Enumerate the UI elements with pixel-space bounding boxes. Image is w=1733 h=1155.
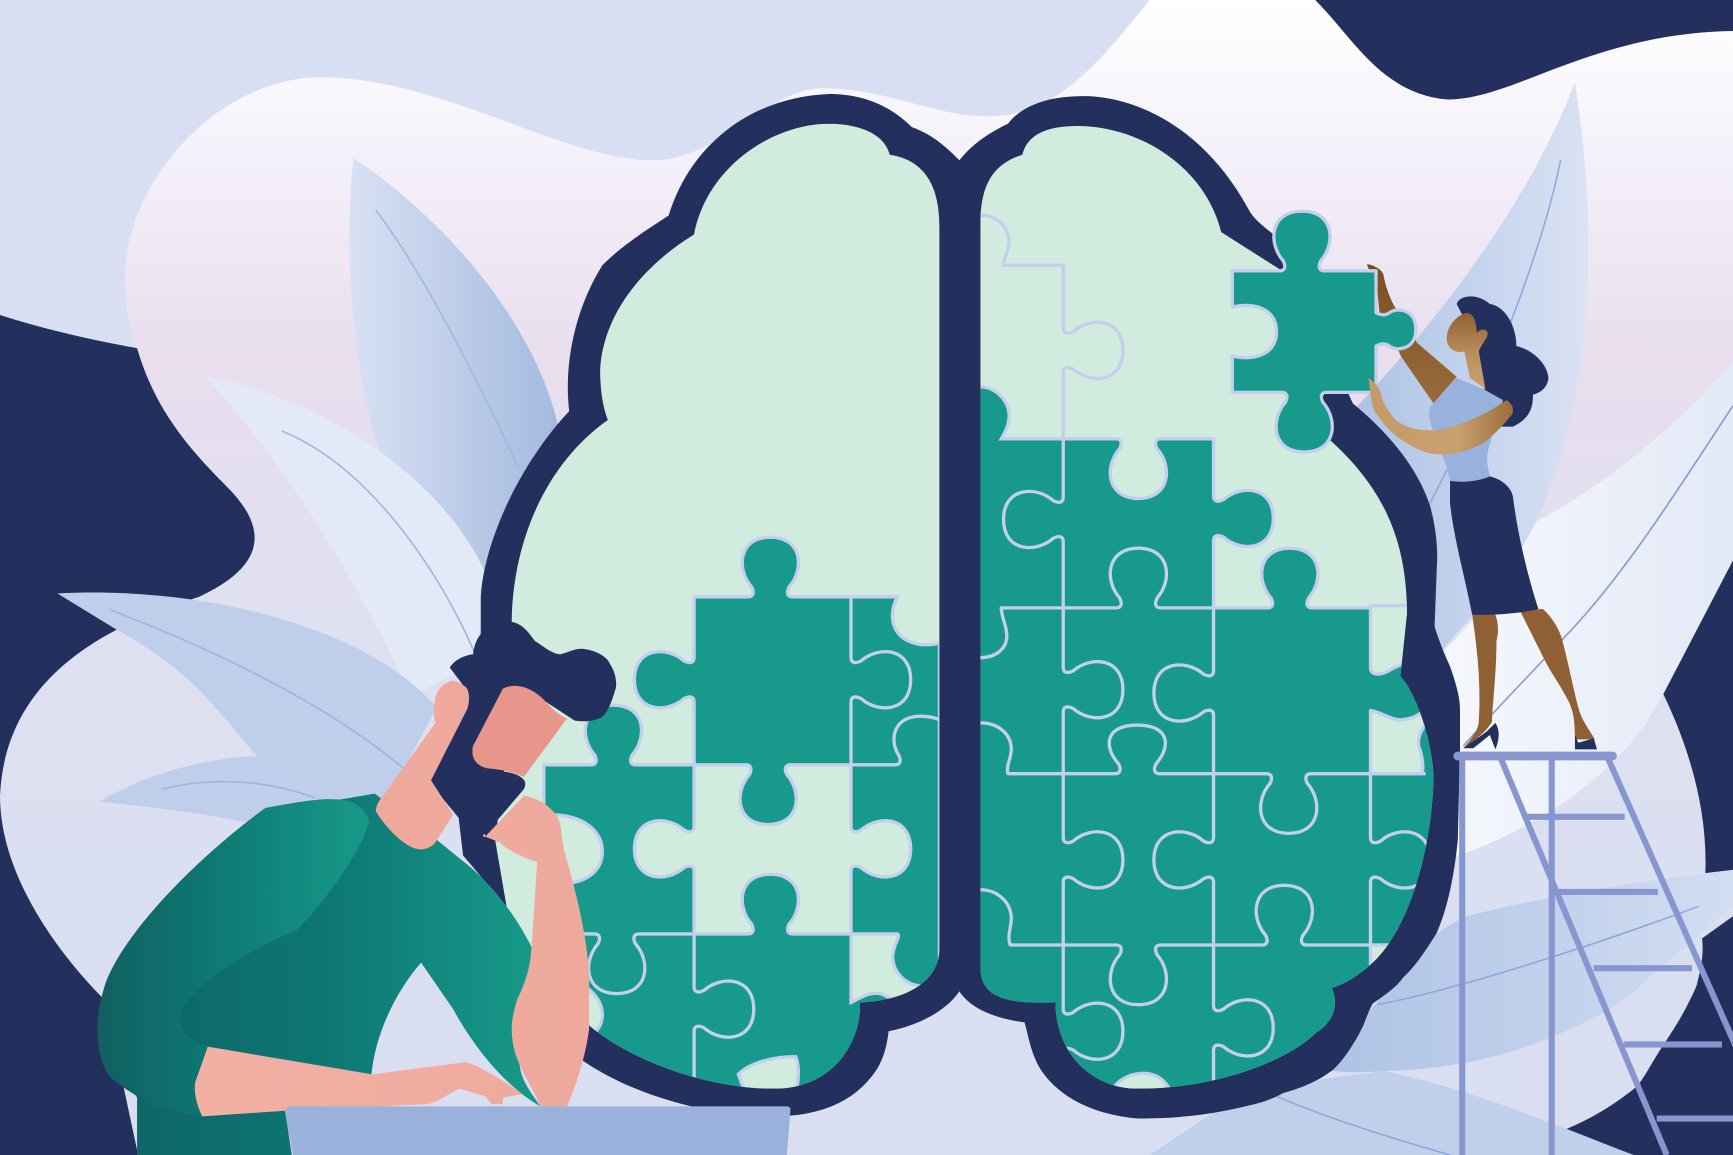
woman's skirt bbox=[1450, 476, 1538, 615]
man's arm supporting chin bbox=[485, 796, 589, 1106]
man's forearm and hand bbox=[195, 1047, 523, 1116]
navy shape: right bbox=[1663, 560, 1733, 873]
navy shape: lower right bbox=[1565, 916, 1733, 1155]
man's hair and beard bbox=[431, 622, 616, 852]
right lobe puzzle bbox=[980, 126, 1434, 1089]
brain outline bbox=[481, 94, 1460, 1119]
woman on ladder bbox=[1368, 296, 1597, 749]
woman's lower arm bbox=[1368, 378, 1513, 454]
left lobe mint base bbox=[475, 111, 950, 1105]
leaf: bottom bbox=[1149, 1071, 1634, 1155]
woman's hair bbox=[1457, 296, 1548, 427]
leaf: lower right bbox=[1315, 870, 1733, 1072]
ladder bbox=[1453, 752, 1733, 1155]
floating puzzle piece bbox=[1232, 211, 1416, 452]
woman's legs bbox=[1463, 609, 1595, 748]
man's face bbox=[472, 686, 567, 777]
man's hair back strip bbox=[459, 818, 506, 906]
navy shape: left bbox=[0, 315, 255, 1155]
right lobe teal pieces bbox=[980, 385, 1434, 1088]
right lobe mint patches bbox=[1111, 606, 1429, 1094]
laptop bbox=[286, 1106, 790, 1155]
woman's raised arm bbox=[1367, 264, 1457, 403]
leaf: upper left bbox=[349, 158, 580, 619]
man's sleeve bbox=[97, 799, 369, 1115]
woman's face and neck bbox=[1447, 313, 1488, 389]
man's raised arm and hand bbox=[376, 681, 469, 849]
leaf: upper right behind woman bbox=[1353, 83, 1588, 659]
ladder platform bbox=[1453, 752, 1617, 760]
right lobe top piece lines bbox=[980, 215, 1123, 439]
left lobe puzzle bbox=[475, 111, 950, 1105]
left lobe teal pieces bbox=[544, 537, 939, 1105]
leaf: white right bbox=[1435, 360, 1733, 857]
leaf: middle left bbox=[204, 376, 486, 696]
left lobe mint centre piece bbox=[634, 765, 911, 934]
right lobe mint base bbox=[973, 111, 1459, 1105]
left lobe mint patches bbox=[542, 815, 920, 1095]
man's body bbox=[122, 794, 540, 1155]
navy shape: top right bbox=[1315, 0, 1733, 99]
left lobe piece lines bbox=[584, 597, 943, 1098]
woman's shoes bbox=[1463, 723, 1597, 749]
right lobe piece lines bbox=[973, 439, 1430, 1098]
leaf: lower left bbox=[57, 593, 437, 823]
woman's blouse bbox=[1429, 378, 1503, 482]
